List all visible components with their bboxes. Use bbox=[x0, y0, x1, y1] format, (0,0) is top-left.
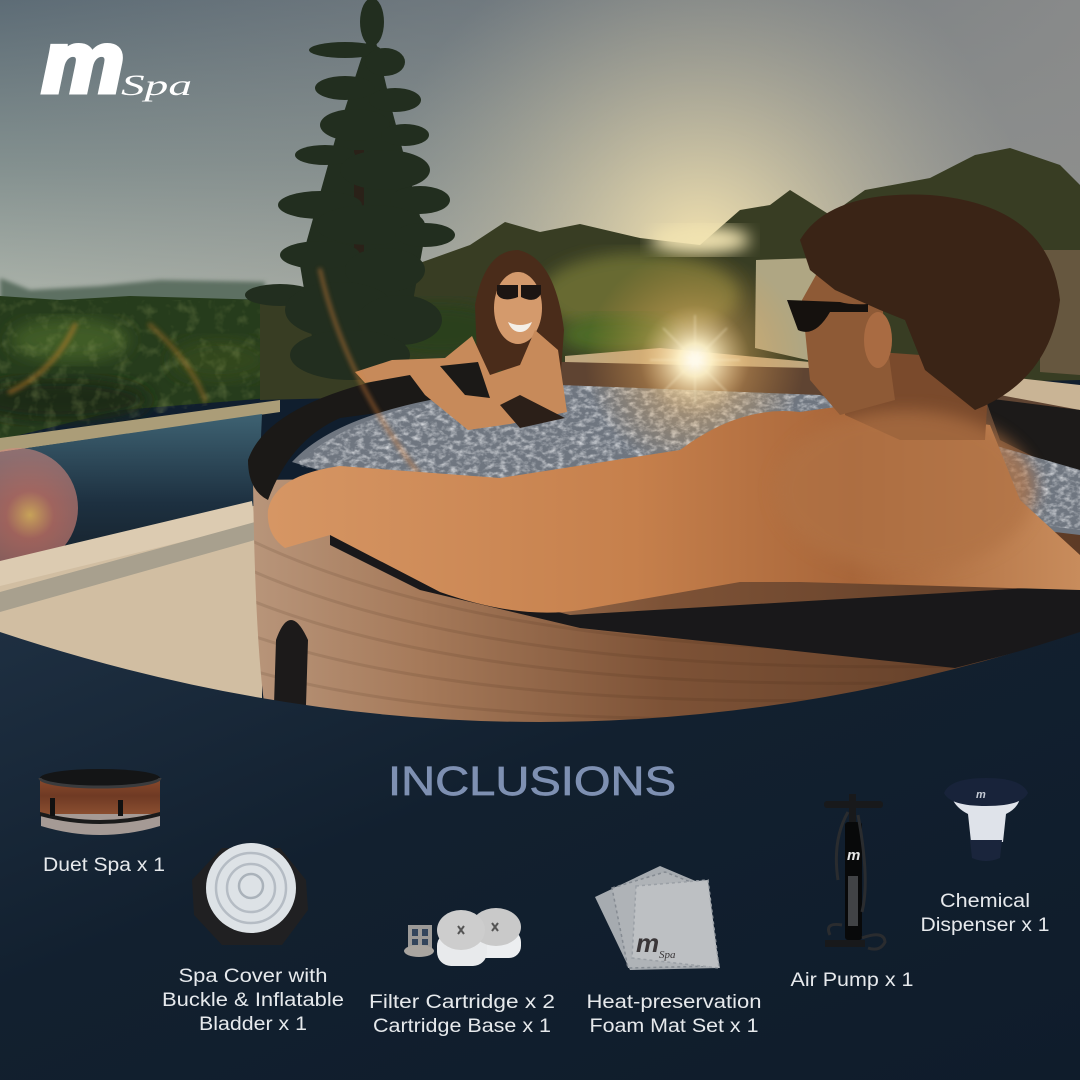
icon: foam mat tiles: m bbox=[636, 928, 659, 958]
rim behind arm bbox=[440, 362, 490, 398]
item: air pump bbox=[790, 794, 914, 991]
woman bbox=[355, 250, 567, 430]
label: Heat-preservation bbox=[586, 992, 762, 1013]
tub rim left bbox=[248, 366, 490, 500]
lens flare bbox=[0, 448, 78, 568]
item: spa cover bbox=[162, 843, 344, 1035]
infinity pool water bbox=[0, 414, 262, 563]
label: Spa Cover with bbox=[178, 966, 328, 987]
face bbox=[802, 250, 895, 415]
heading: inclusions: INCLUSIONS bbox=[388, 758, 676, 804]
icon: air pump: m bbox=[847, 847, 860, 864]
logo: mSpa: Spa bbox=[121, 69, 192, 102]
front rim of the tub bbox=[330, 530, 1080, 668]
pebble strip bbox=[0, 522, 255, 612]
icon: foam mat tiles: Spa bbox=[659, 949, 676, 961]
item: duet spa bbox=[40, 769, 165, 876]
label bbox=[369, 992, 555, 1037]
icon: filter cartridges bbox=[437, 908, 521, 966]
right side screen bbox=[1040, 250, 1080, 375]
man bbox=[268, 195, 1080, 613]
panel: inclusions background bbox=[0, 632, 1080, 1080]
tub handle bbox=[274, 620, 308, 705]
back shadow bbox=[775, 410, 1035, 570]
label: Duet Spa x 1 bbox=[43, 855, 165, 876]
lens flare streak bbox=[10, 270, 425, 482]
wooden tub wall bbox=[250, 470, 1080, 730]
icon: foam mat tiles bbox=[595, 866, 720, 970]
icon: chemical dispenser: m bbox=[976, 789, 986, 801]
left forest valley bbox=[0, 290, 270, 440]
label: Filter Cartridge x 2 bbox=[369, 992, 555, 1013]
face and shades bbox=[494, 272, 542, 344]
right deck bbox=[990, 375, 1080, 420]
tub rim right bbox=[985, 398, 1080, 480]
pool coping bbox=[0, 400, 280, 452]
icon: cartridge base bbox=[404, 925, 434, 957]
item: foam mats bbox=[586, 866, 762, 1037]
label: Bladder x 1 bbox=[199, 1014, 307, 1035]
near coping bbox=[0, 501, 255, 586]
item: filter cartridges bbox=[369, 908, 555, 1037]
arm and back bbox=[268, 405, 1080, 613]
hair bbox=[475, 250, 564, 385]
distant hills bbox=[0, 278, 265, 330]
hair bbox=[800, 195, 1060, 410]
label bbox=[162, 966, 344, 1035]
label: Dispenser x 1 bbox=[920, 915, 1050, 936]
tall pine tree bbox=[245, 0, 455, 380]
item: chemical dispenser bbox=[920, 778, 1050, 936]
treeline behind the spa bbox=[260, 148, 1080, 400]
label: Cartridge Base x 1 bbox=[373, 1016, 551, 1037]
ear bbox=[864, 312, 892, 368]
photo: couple relaxing in hot tub at sunset bbox=[0, 0, 1080, 730]
sky bbox=[0, 0, 1080, 400]
label: Air Pump x 1 bbox=[790, 970, 914, 991]
logo: mSpa: m bbox=[42, 15, 124, 111]
sun glare bbox=[585, 250, 805, 470]
label: Chemical bbox=[940, 891, 1030, 912]
label: Foam Mat Set x 1 bbox=[590, 1016, 758, 1037]
aerated water bbox=[280, 380, 1080, 540]
icon: inflatable cover bbox=[192, 843, 308, 945]
glass balustrade bbox=[755, 258, 816, 362]
neck bbox=[845, 350, 990, 440]
swimsuit bbox=[500, 395, 565, 428]
icon: chemical dispenser bbox=[944, 778, 1028, 861]
icon: air pump bbox=[824, 794, 885, 949]
label bbox=[586, 992, 762, 1037]
tub back wall bbox=[560, 348, 1080, 480]
logo: mSpa bbox=[42, 15, 192, 111]
label: Buckle & Inflatable bbox=[162, 990, 344, 1011]
label bbox=[920, 891, 1050, 936]
deck bbox=[0, 500, 262, 720]
icon: duet spa tub bbox=[40, 769, 160, 835]
sunglasses bbox=[787, 300, 868, 332]
body and arms bbox=[355, 330, 567, 430]
